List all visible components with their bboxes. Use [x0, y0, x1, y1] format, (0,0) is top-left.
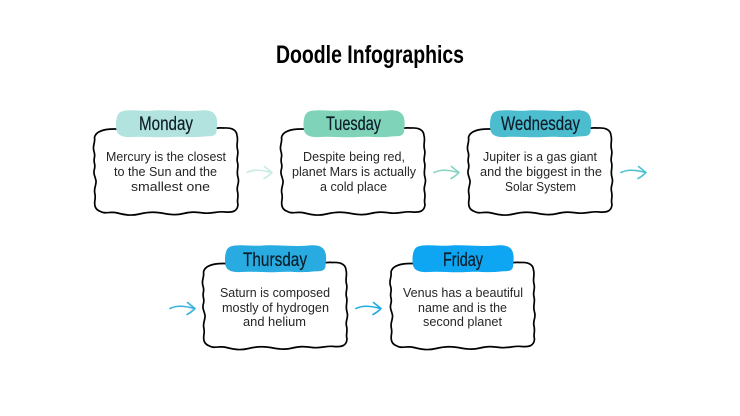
- Thursday description: mostly of hydrogen: [222, 301, 329, 315]
- Tuesday heading pill: [303, 110, 405, 137]
- Monday card outline: [93, 128, 239, 215]
- Friday card outline: [390, 262, 535, 350]
- Tuesday card outline: [280, 128, 426, 215]
- panel: Tuesday: [280, 110, 426, 215]
- Wednesday description: Solar System: [505, 180, 576, 194]
- arrow: into Thursday: [170, 302, 195, 314]
- Thursday heading: Thursday: [243, 250, 307, 271]
- arrow: Thursday to Friday: [356, 302, 381, 314]
- Tuesday description: Despite being red,: [303, 150, 405, 164]
- Wednesday heading: Wednesday: [501, 114, 580, 135]
- Friday heading: Friday: [443, 250, 483, 271]
- Tuesday heading: Tuesday: [326, 114, 381, 135]
- Tuesday description: a cold place: [320, 180, 387, 194]
- Friday description: [403, 286, 523, 329]
- Monday description: to the Sun and the: [114, 165, 217, 179]
- arrow: Tuesday to Wednesday: [434, 166, 459, 178]
- Thursday description: and helium: [243, 315, 306, 329]
- arrow: Wednesday onward: [621, 166, 646, 178]
- Tuesday description: [292, 150, 417, 194]
- panel: Wednesday: [467, 110, 613, 215]
- Thursday heading pill: [225, 245, 326, 272]
- Monday heading: Monday: [139, 114, 193, 135]
- Tuesday description: planet Mars is actually: [292, 165, 417, 179]
- Thursday description: Saturn is composed: [220, 286, 330, 300]
- Thursday description: [220, 286, 330, 329]
- panel: Thursday: [202, 245, 348, 350]
- Monday description: Mercury is the closest: [106, 150, 227, 164]
- Friday heading pill: [412, 245, 514, 272]
- Wednesday description: [480, 150, 602, 194]
- Monday description: smallest one: [131, 180, 210, 194]
- Friday description: name and is the: [418, 301, 507, 315]
- Friday description: second planet: [423, 315, 503, 329]
- Monday description: [106, 150, 227, 194]
- Friday description: Venus has a beautiful: [403, 286, 523, 300]
- Wednesday description: Jupiter is a gas giant: [483, 150, 598, 164]
- Wednesday heading pill: [490, 110, 591, 137]
- title: Doodle Infographics: [276, 41, 464, 69]
- panel: Monday: [93, 110, 239, 215]
- Thursday card outline: [202, 262, 348, 350]
- Monday heading pill: [116, 110, 217, 137]
- arrow: Monday to Tuesday: [247, 166, 272, 178]
- Wednesday card outline: [467, 128, 613, 215]
- panel: Friday: [390, 245, 535, 350]
- Wednesday description: and the biggest in the: [480, 165, 602, 179]
